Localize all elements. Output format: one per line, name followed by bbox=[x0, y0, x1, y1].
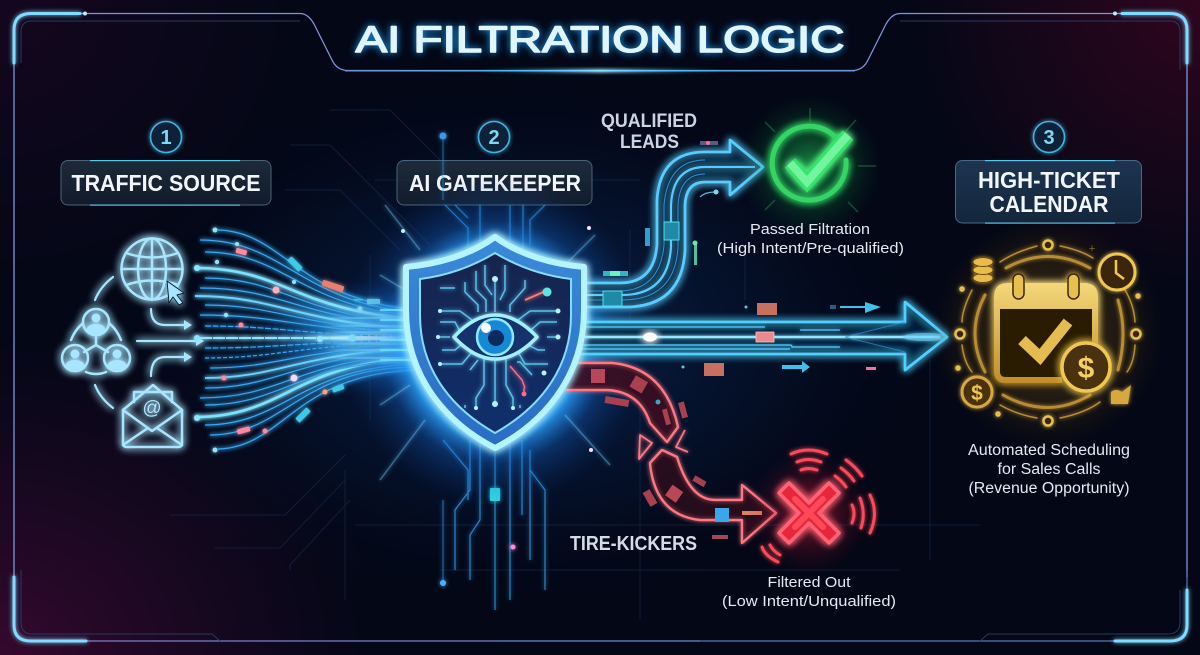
calendar body bbox=[994, 274, 1098, 383]
small tool icon bbox=[1111, 385, 1131, 404]
step 1: traffic source heading bbox=[61, 122, 271, 206]
data chips above and below arrow bbox=[682, 302, 881, 376]
number badge 3: 3 bbox=[1043, 127, 1055, 149]
label box: traffic source bbox=[61, 160, 271, 206]
orbit nodes bbox=[956, 240, 1140, 426]
data flow lines converging on shield bbox=[194, 228, 470, 452]
step 3: high-ticket calendar heading bbox=[956, 122, 1142, 224]
shield circuit traces bbox=[438, 265, 560, 408]
coin: $ bbox=[1078, 352, 1095, 385]
number badge 1 bbox=[150, 122, 182, 152]
label box: AI gatekeeper: AI GATEKEEPER bbox=[409, 170, 581, 196]
flow particles bbox=[194, 228, 380, 452]
icon: email envelope bbox=[123, 385, 182, 447]
icon: email envelope: @ bbox=[142, 398, 162, 419]
icon: green check bbox=[738, 94, 882, 238]
small coin bbox=[962, 377, 992, 407]
title bbox=[345, 18, 855, 72]
passed filtration caption bbox=[717, 221, 904, 257]
icon: gold calendar with coins: + bbox=[1089, 243, 1095, 255]
ring segments around people bbox=[95, 277, 113, 408]
passed filtration caption: Passed Filtration bbox=[750, 221, 870, 238]
number badge 3 bbox=[1034, 122, 1064, 152]
passed filtration caption: (High Intent/Pre-qualified) bbox=[717, 240, 904, 257]
qualified leads label bbox=[601, 111, 697, 153]
step 1 source icons bbox=[62, 238, 204, 447]
calendar caption: Automated Scheduling bbox=[968, 442, 1130, 459]
qualified leads label: LEADS bbox=[620, 132, 679, 153]
label box: traffic source: TRAFFIC SOURCE bbox=[72, 170, 260, 196]
icon: gold calendar with coins bbox=[930, 215, 1166, 451]
pass path: qualified leads arrow bbox=[585, 140, 763, 307]
data chips on reject path bbox=[591, 369, 762, 539]
coin bbox=[1062, 343, 1110, 391]
reject path: tire-kickers arrow bbox=[565, 363, 776, 543]
number badge 1: 1 bbox=[160, 127, 172, 149]
title: AI FILTRATION LOGIC bbox=[356, 18, 844, 60]
filtered out caption bbox=[722, 574, 896, 610]
label box: AI gatekeeper bbox=[397, 160, 592, 205]
orbit rings bbox=[962, 246, 1135, 418]
calendar caption: for Sales Calls bbox=[998, 461, 1101, 478]
data chips on pass path bbox=[603, 141, 718, 306]
filtered out caption: Filtered Out bbox=[768, 574, 851, 591]
tire-kickers label: TIRE-KICKERS bbox=[570, 533, 697, 555]
icon: connected people bbox=[62, 309, 130, 374]
eye bbox=[454, 315, 537, 359]
label box: high-ticket calendar: HIGH-TICKET bbox=[978, 167, 1121, 193]
coin stack bbox=[973, 258, 993, 282]
label box: high-ticket calendar: CALENDAR bbox=[990, 191, 1109, 217]
calendar caption: (Revenue Opportunity) bbox=[968, 480, 1130, 497]
clock bbox=[1099, 254, 1135, 290]
main arrow to calendar bbox=[580, 302, 947, 376]
icon: red X with alert waves bbox=[747, 450, 874, 575]
shield glow and rays bbox=[343, 177, 647, 507]
qualified leads label: QUALIFIED bbox=[601, 111, 697, 132]
circuit traces around shield bbox=[440, 132, 545, 610]
number badge 2: 2 bbox=[488, 127, 500, 149]
step 2: AI gatekeeper heading bbox=[397, 122, 592, 205]
number badge 2 bbox=[478, 122, 510, 152]
icon: globe with cursor bbox=[122, 238, 184, 305]
calendar caption bbox=[968, 442, 1130, 497]
filtered out caption: (Low Intent/Unqualified) bbox=[722, 593, 896, 610]
horizontal lines left of shield bbox=[380, 310, 412, 360]
icon: AI shield bbox=[406, 237, 584, 448]
small coin: $ bbox=[971, 382, 983, 405]
arrows into flow bbox=[137, 309, 204, 376]
label box: high-ticket calendar bbox=[956, 160, 1142, 224]
